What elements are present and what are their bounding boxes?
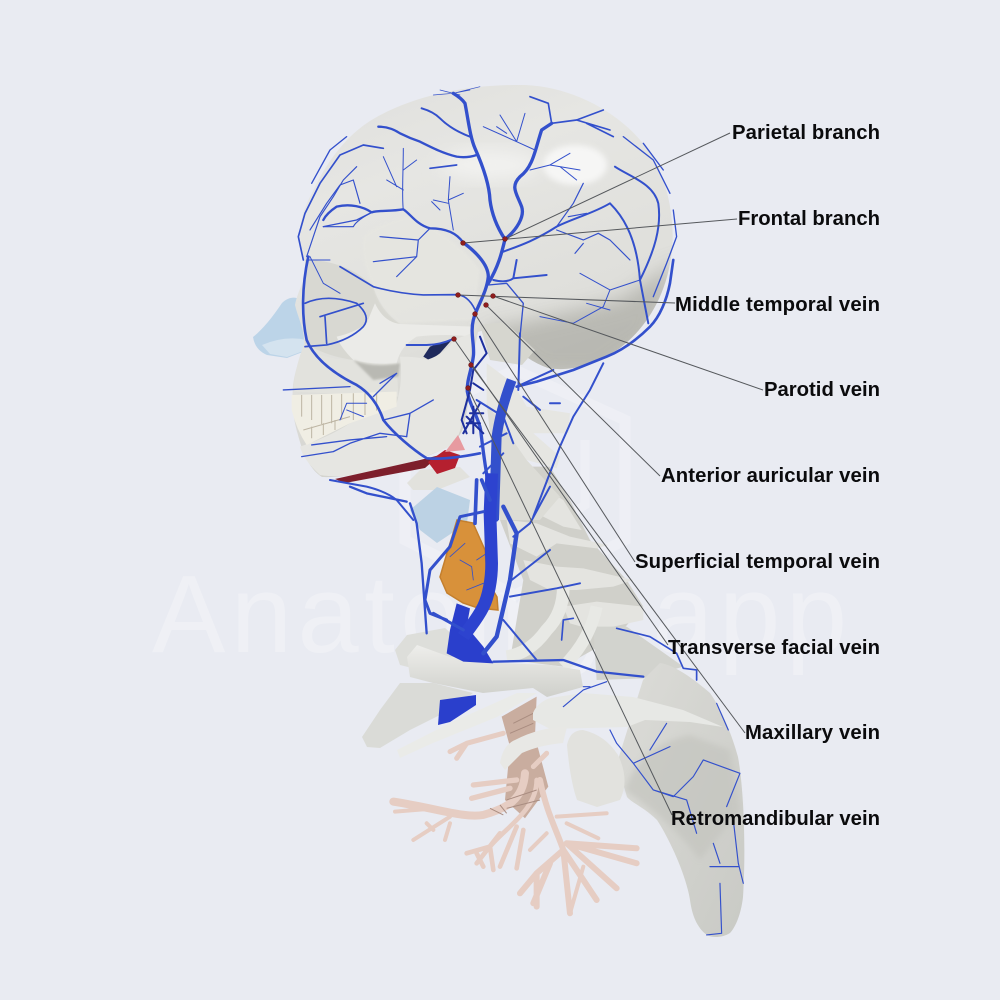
transverse facial vein — [407, 339, 454, 345]
subclavian and suprascapular veins — [493, 660, 643, 677]
brachiocephalic confluence — [447, 603, 493, 663]
label: Anterior auricular vein: Anterior auricular vein — [661, 465, 880, 487]
scapula — [500, 663, 744, 937]
retromandibular network — [462, 337, 487, 433]
larynx: hyoid and thyroid cartilage — [407, 467, 470, 543]
bronchial tree and trachea — [393, 697, 637, 913]
label: Retromandibular vein: Retromandibular vein — [671, 808, 880, 830]
label: Frontal branch: Frontal branch — [738, 208, 880, 230]
label: Middle temporal vein: Middle temporal vein — [675, 294, 880, 316]
skull — [292, 85, 680, 477]
superficial temporal main trunk — [463, 243, 497, 520]
label: Transverse facial vein: Transverse facial vein — [668, 637, 880, 659]
vein marker dots — [452, 237, 507, 390]
eye orbit — [305, 260, 400, 360]
watermark logo — [405, 370, 625, 595]
face details — [292, 217, 480, 476]
label: Superficial temporal vein: Superficial temporal vein — [635, 551, 880, 573]
thyroid veins — [425, 512, 483, 630]
thyroid gland surface veins — [450, 543, 487, 590]
floor of mouth muscle — [335, 435, 465, 483]
lower neck and shoulder veins — [350, 473, 743, 935]
veins of head and neck — [283, 87, 677, 520]
label: Maxillary vein: Maxillary vein — [745, 722, 880, 744]
illustration: head, neck and shoulder anatomy with labels — [253, 85, 879, 937]
temporal fossa — [363, 217, 480, 323]
large subclavian vein behind clavicle — [438, 695, 476, 725]
acromion and spine of scapula — [533, 693, 723, 729]
thyroid gland — [440, 520, 498, 610]
infratemporal gap — [423, 338, 453, 361]
internal jugular vein — [463, 473, 492, 637]
leader lines — [454, 133, 763, 815]
glenoid cavity — [567, 730, 625, 807]
anterior jugular vein — [350, 487, 427, 633]
facial vein and branches — [283, 257, 480, 520]
cervical vertebrae and ribs — [493, 467, 683, 680]
upper cervical vertebrae — [487, 363, 570, 520]
mandible ramus and body — [300, 333, 472, 476]
cheek shadow — [353, 360, 400, 380]
frontal branch tree — [298, 137, 463, 277]
zygomatic arch — [337, 303, 473, 364]
coracoid process — [500, 727, 567, 770]
label: Parietal branch: Parietal branch — [732, 122, 880, 144]
external jugular lower — [483, 507, 517, 653]
maxilla — [293, 347, 398, 397]
posterior scalp branches — [488, 137, 677, 387]
label: Parotid vein: Parotid vein — [764, 379, 880, 401]
middle temporal vein — [340, 267, 477, 313]
external jugular vein — [494, 380, 512, 520]
mastoid region — [480, 322, 535, 365]
cranium and face — [293, 85, 673, 477]
teeth — [292, 392, 397, 445]
watermark wordmark: Anatomy.app — [152, 553, 847, 676]
shading clipped to skull — [452, 144, 670, 369]
contralateral scapula and first rib — [362, 683, 537, 758]
posterior neck vein — [533, 363, 603, 517]
parietal branch tree — [378, 87, 613, 239]
scapular veins — [563, 682, 743, 935]
nasal cartilage — [253, 298, 308, 358]
clavicle — [395, 628, 583, 697]
